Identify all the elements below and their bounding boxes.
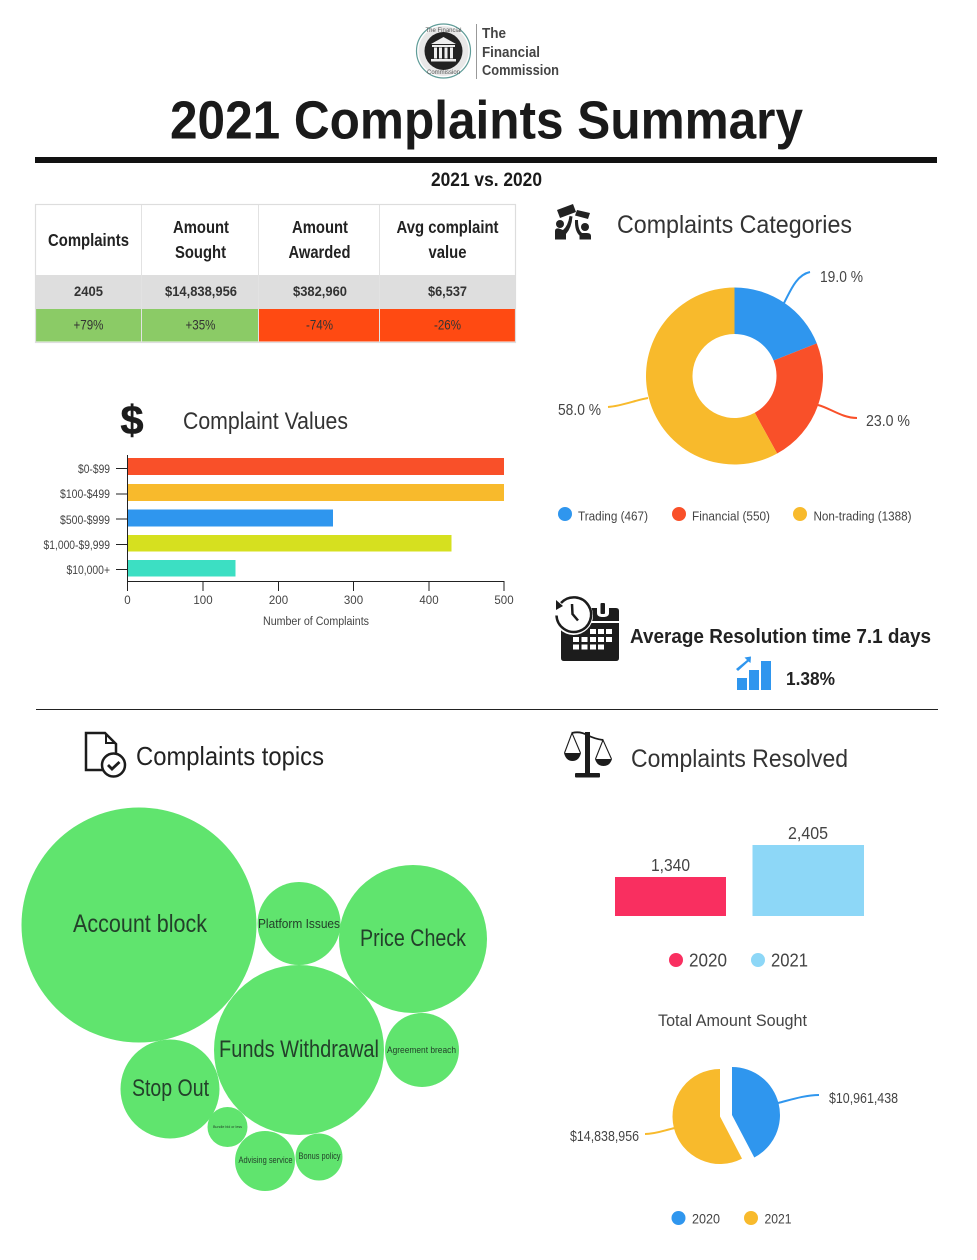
- icon: document with check: [86, 733, 125, 776]
- title rule: [35, 157, 937, 163]
- legend: complaints resolved: [669, 950, 808, 970]
- icon: complaints categories: [555, 204, 591, 240]
- average resolution time: Average Resolution time 7.1 days: [630, 625, 931, 648]
- table values: $6,537: [428, 283, 467, 299]
- logo: The Financial Commission: Commission: [482, 63, 559, 79]
- table header: Awarded: [288, 242, 350, 262]
- table header: value: [428, 242, 467, 262]
- subtitle: 2021 vs. 2020: [431, 170, 542, 191]
- table values: [74, 283, 467, 299]
- legend: complaints resolved: 2021: [771, 950, 808, 970]
- table changes: -26%: [434, 316, 461, 332]
- logo: The Financial Commission: [416, 24, 559, 79]
- bubble chart: complaints topics: Agreement breach: [387, 1045, 456, 1056]
- non-trading slice: [646, 288, 777, 464]
- bar chart: complaint values: 400: [419, 595, 439, 607]
- pie chart: total amount sought: [570, 1067, 898, 1164]
- legend: total amount sought: 2020: [692, 1210, 720, 1226]
- bar chart: complaints resolved: 2,405: [788, 823, 828, 843]
- donut chart: 58.0 %: [558, 402, 601, 419]
- heading: complaints topics: Complaints topics: [136, 741, 324, 771]
- table header: Sought: [175, 242, 226, 262]
- table changes: +35%: [186, 316, 216, 332]
- pie chart: total amount sought: $14,838,956: [570, 1129, 639, 1145]
- table changes: -74%: [306, 316, 333, 332]
- donut legend: Non-trading (1388): [814, 508, 912, 524]
- donut chart: 23.0 %: [866, 413, 910, 430]
- table header: Amount: [173, 217, 229, 237]
- heading: complaints categories: Complaints Categories: [617, 211, 852, 239]
- bubble chart: complaints topics: Bonus policy: [298, 1151, 341, 1161]
- bar chart: complaint values: $500-$999: [60, 515, 110, 527]
- bar chart: complaint values: 500: [494, 595, 514, 607]
- logo: The Financial Commission: Commission: [427, 70, 460, 76]
- legend: total amount sought: [672, 1210, 792, 1226]
- donut chart: [558, 269, 910, 464]
- bar chart: complaint values: Number of Complaints: [263, 616, 369, 628]
- bar chart: complaint values: $0-$99: [78, 464, 110, 476]
- logo: The Financial Commission: The: [482, 26, 506, 42]
- financial slice: [755, 343, 823, 454]
- icon: calendar with clock: [554, 596, 619, 661]
- bubble chart: complaints topics: [22, 808, 487, 1191]
- trading slice: [734, 288, 817, 361]
- bar chart: complaint values: 200: [269, 595, 288, 607]
- growth value: 1.38%: [786, 669, 835, 689]
- bubble chart: complaints topics: Bundle bid or less: [213, 1124, 242, 1129]
- donut chart: 19.0 %: [820, 269, 863, 286]
- bar chart: complaint values: 100: [193, 595, 213, 607]
- legend: complaints resolved: 2020: [689, 950, 727, 970]
- bar chart: complaints resolved: [615, 823, 864, 916]
- icon: rising bars: [736, 656, 771, 690]
- bubble chart: complaints topics: Funds Withdrawal: [219, 1036, 379, 1063]
- heading: complaint values: Complaint Values: [183, 408, 348, 435]
- bar chart: complaint values: $1,000-$9,999: [44, 540, 110, 552]
- table values: $14,838,956: [165, 283, 237, 299]
- table changes: [74, 316, 461, 332]
- bubble chart: complaints topics: Account block: [73, 910, 207, 938]
- table values: $382,960: [293, 283, 347, 299]
- icon: dollar sign: $: [120, 397, 144, 443]
- bubble chart: complaints topics: Advising service: [238, 1155, 292, 1165]
- pie chart: total amount sought: $10,961,438: [829, 1091, 898, 1107]
- logo: The Financial Commission: The Financial: [425, 28, 462, 34]
- section rule: [36, 709, 938, 710]
- donut legend: Financial (550): [692, 508, 770, 524]
- bar chart: complaint values: 0: [124, 595, 131, 607]
- heading: complaints resolved: Complaints Resolved: [631, 745, 848, 773]
- bubble chart: complaints topics: Stop Out: [132, 1075, 209, 1102]
- table changes: +79%: [74, 316, 104, 332]
- heading: total amount sought: Total Amount Sought: [658, 1012, 807, 1030]
- bubble chart: complaints topics: Price Check: [360, 925, 467, 952]
- panel: summary table: [35, 204, 516, 343]
- table header: Complaints: [48, 230, 129, 250]
- table values: 2405: [74, 283, 103, 299]
- bar chart: complaint values: 300: [344, 595, 363, 607]
- table header: Avg complaint: [396, 217, 499, 237]
- bar chart: complaint values: $10,000+: [66, 565, 110, 577]
- logo: The Financial Commission: Financial: [482, 45, 540, 61]
- icon: scales: [564, 732, 612, 778]
- red cells: [258, 309, 515, 342]
- bar chart: complaint values: [44, 455, 514, 628]
- bar chart: complaints resolved: 1,340: [651, 855, 690, 875]
- green cells: [36, 309, 258, 342]
- bubble chart: complaints topics: Platform Issues: [258, 917, 340, 931]
- table header: [48, 217, 499, 262]
- donut legend: Trading (467): [578, 508, 648, 524]
- legend: total amount sought: 2021: [764, 1210, 792, 1226]
- table header: Amount: [292, 217, 348, 237]
- donut legend: [558, 507, 912, 524]
- bar chart: complaint values: $100-$499: [60, 489, 110, 501]
- title: 2021 Complaints Summary: [170, 90, 803, 150]
